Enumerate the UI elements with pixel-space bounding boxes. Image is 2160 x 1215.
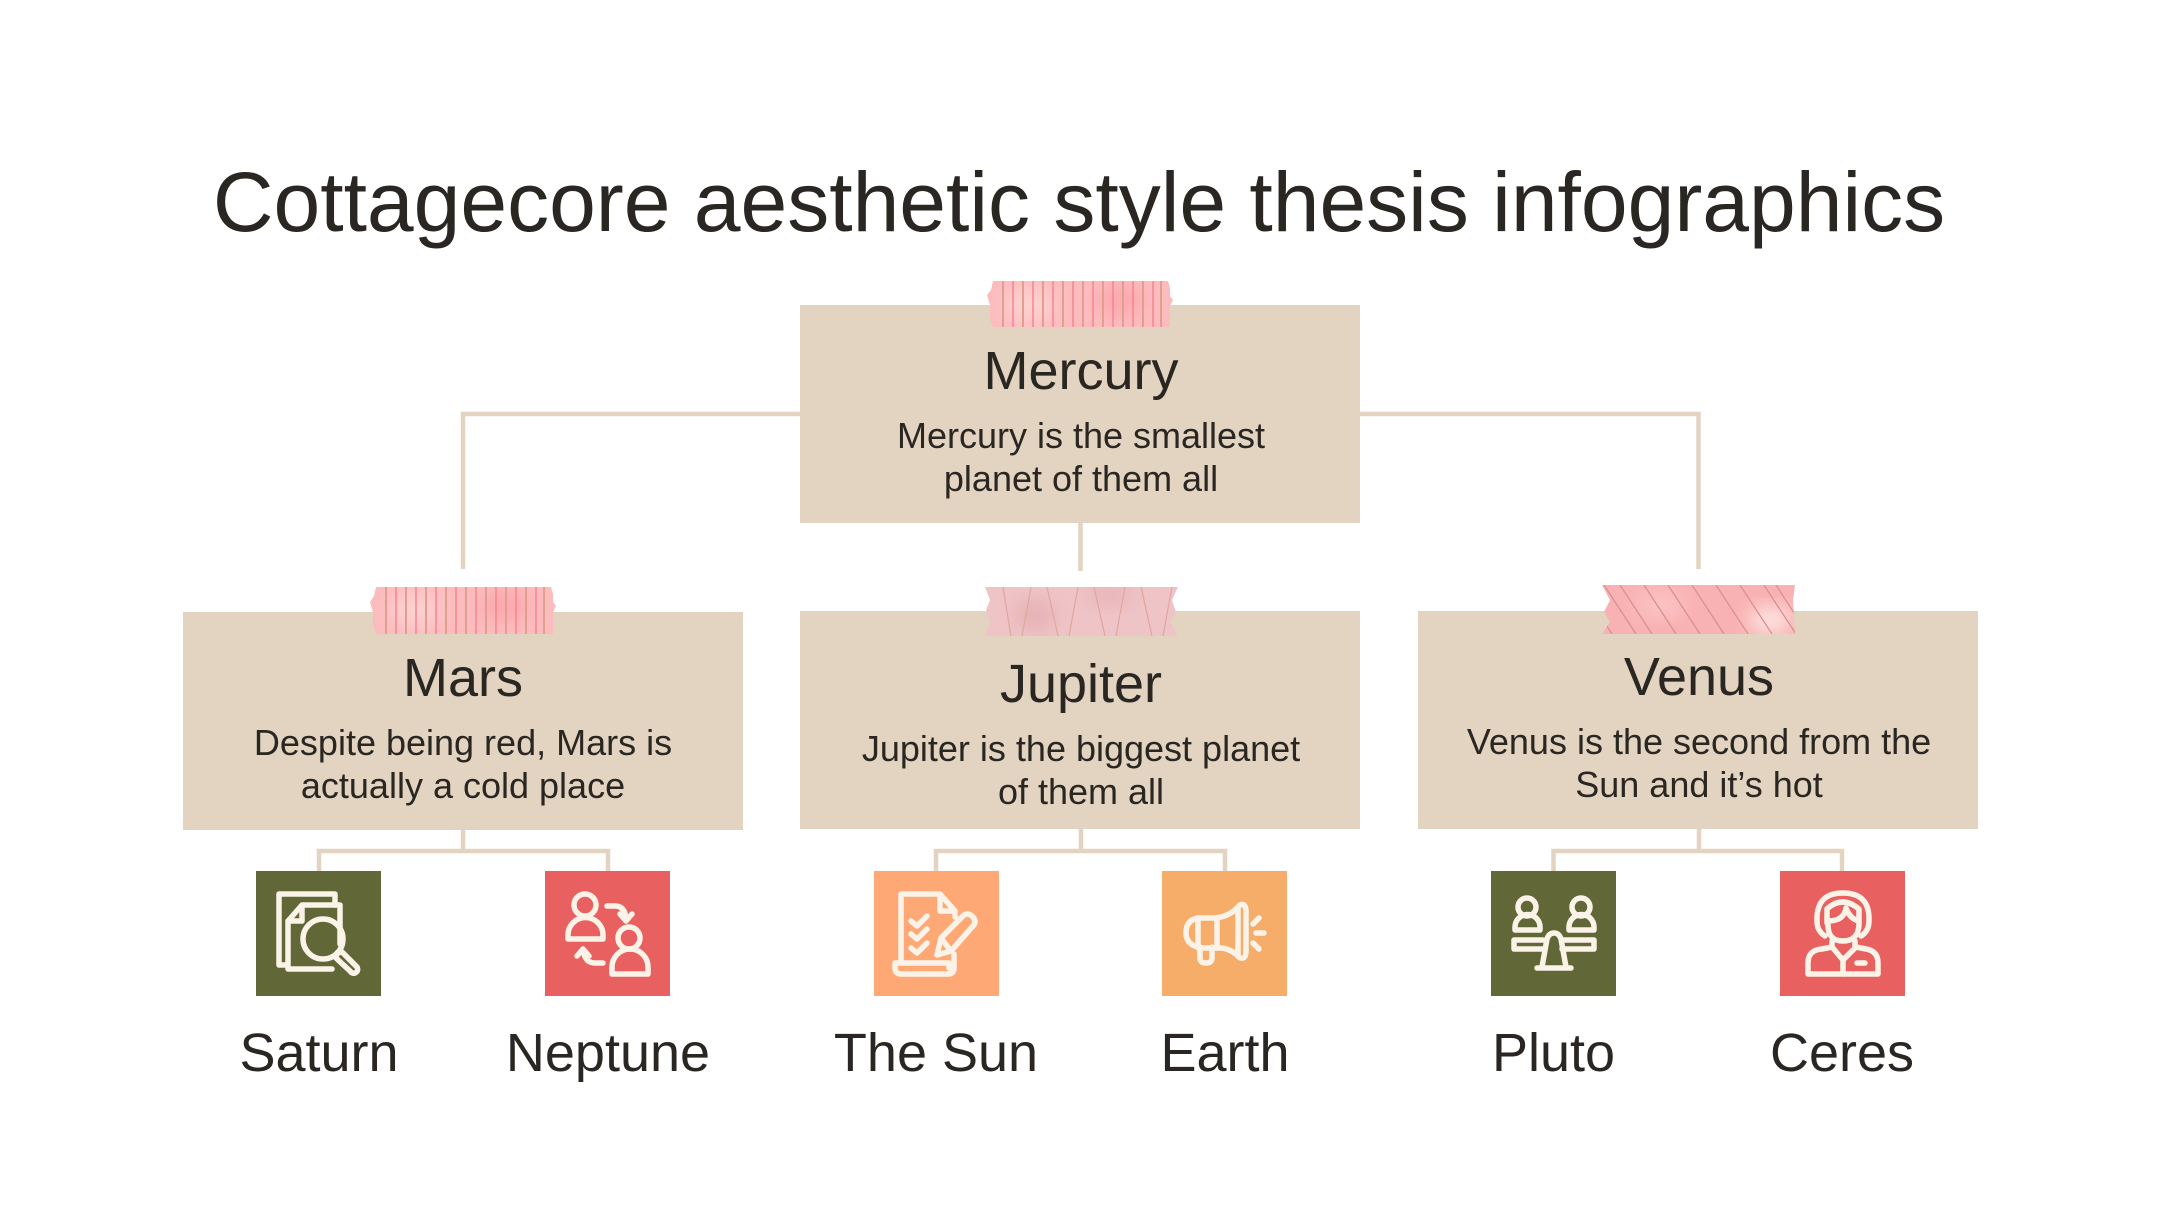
icon: document search (Saturn) bbox=[256, 871, 381, 996]
connectors: Jupiter to icons bbox=[936, 829, 1225, 874]
icon: megaphone (Earth) bbox=[1162, 871, 1287, 996]
panel: Mars bbox=[183, 586, 743, 830]
tape: Mars bbox=[368, 586, 558, 636]
heading: Jupiter: Jupiter bbox=[1000, 654, 1162, 714]
description: Jupiter: of them all bbox=[998, 771, 1164, 812]
tape: Venus bbox=[1602, 585, 1795, 634]
label: The Sun: The Sun bbox=[834, 1023, 1038, 1083]
description: Venus: Sun and it’s hot bbox=[1575, 764, 1823, 805]
label: Pluto: Pluto bbox=[1492, 1023, 1615, 1083]
label: Ceres: Ceres bbox=[1770, 1023, 1914, 1083]
icon: headset person (Ceres) bbox=[1780, 871, 1905, 996]
connectors: Mercury to second row bbox=[463, 414, 1698, 571]
description: Jupiter: Jupiter is the biggest planet bbox=[862, 728, 1300, 769]
heading: Venus: Venus bbox=[1624, 647, 1774, 707]
icon: checklist with pencil (The Sun) bbox=[874, 871, 999, 996]
panel: Venus bbox=[1418, 584, 1978, 829]
icon: exchange people (Neptune) bbox=[545, 871, 670, 996]
label: Earth: Earth bbox=[1160, 1023, 1290, 1083]
description: Mars: Despite being red, Mars is bbox=[254, 722, 672, 763]
icon: balance people (Pluto) bbox=[1491, 871, 1616, 996]
heading: Mars: Mars bbox=[403, 648, 523, 708]
description: Mercury: planet of them all bbox=[944, 458, 1218, 499]
heading: Mercury: Mercury bbox=[983, 341, 1179, 401]
panel: Mercury bbox=[800, 280, 1360, 523]
description: Mars: actually a cold place bbox=[301, 765, 625, 806]
connectors: Venus to icons bbox=[1554, 829, 1842, 871]
panel: Jupiter bbox=[800, 583, 1360, 829]
tape: Jupiter bbox=[985, 587, 1178, 636]
description: Venus: Venus is the second from the bbox=[1467, 721, 1931, 762]
description: Mercury: Mercury is the smallest bbox=[897, 415, 1265, 456]
title: Cottagecore aesthetic style thesis infographics bbox=[213, 155, 1945, 249]
label: Neptune: Neptune bbox=[506, 1023, 710, 1083]
connectors: Mars to icons bbox=[319, 830, 608, 871]
label: Saturn: Saturn bbox=[239, 1023, 399, 1083]
tape: Mercury bbox=[985, 280, 1175, 330]
